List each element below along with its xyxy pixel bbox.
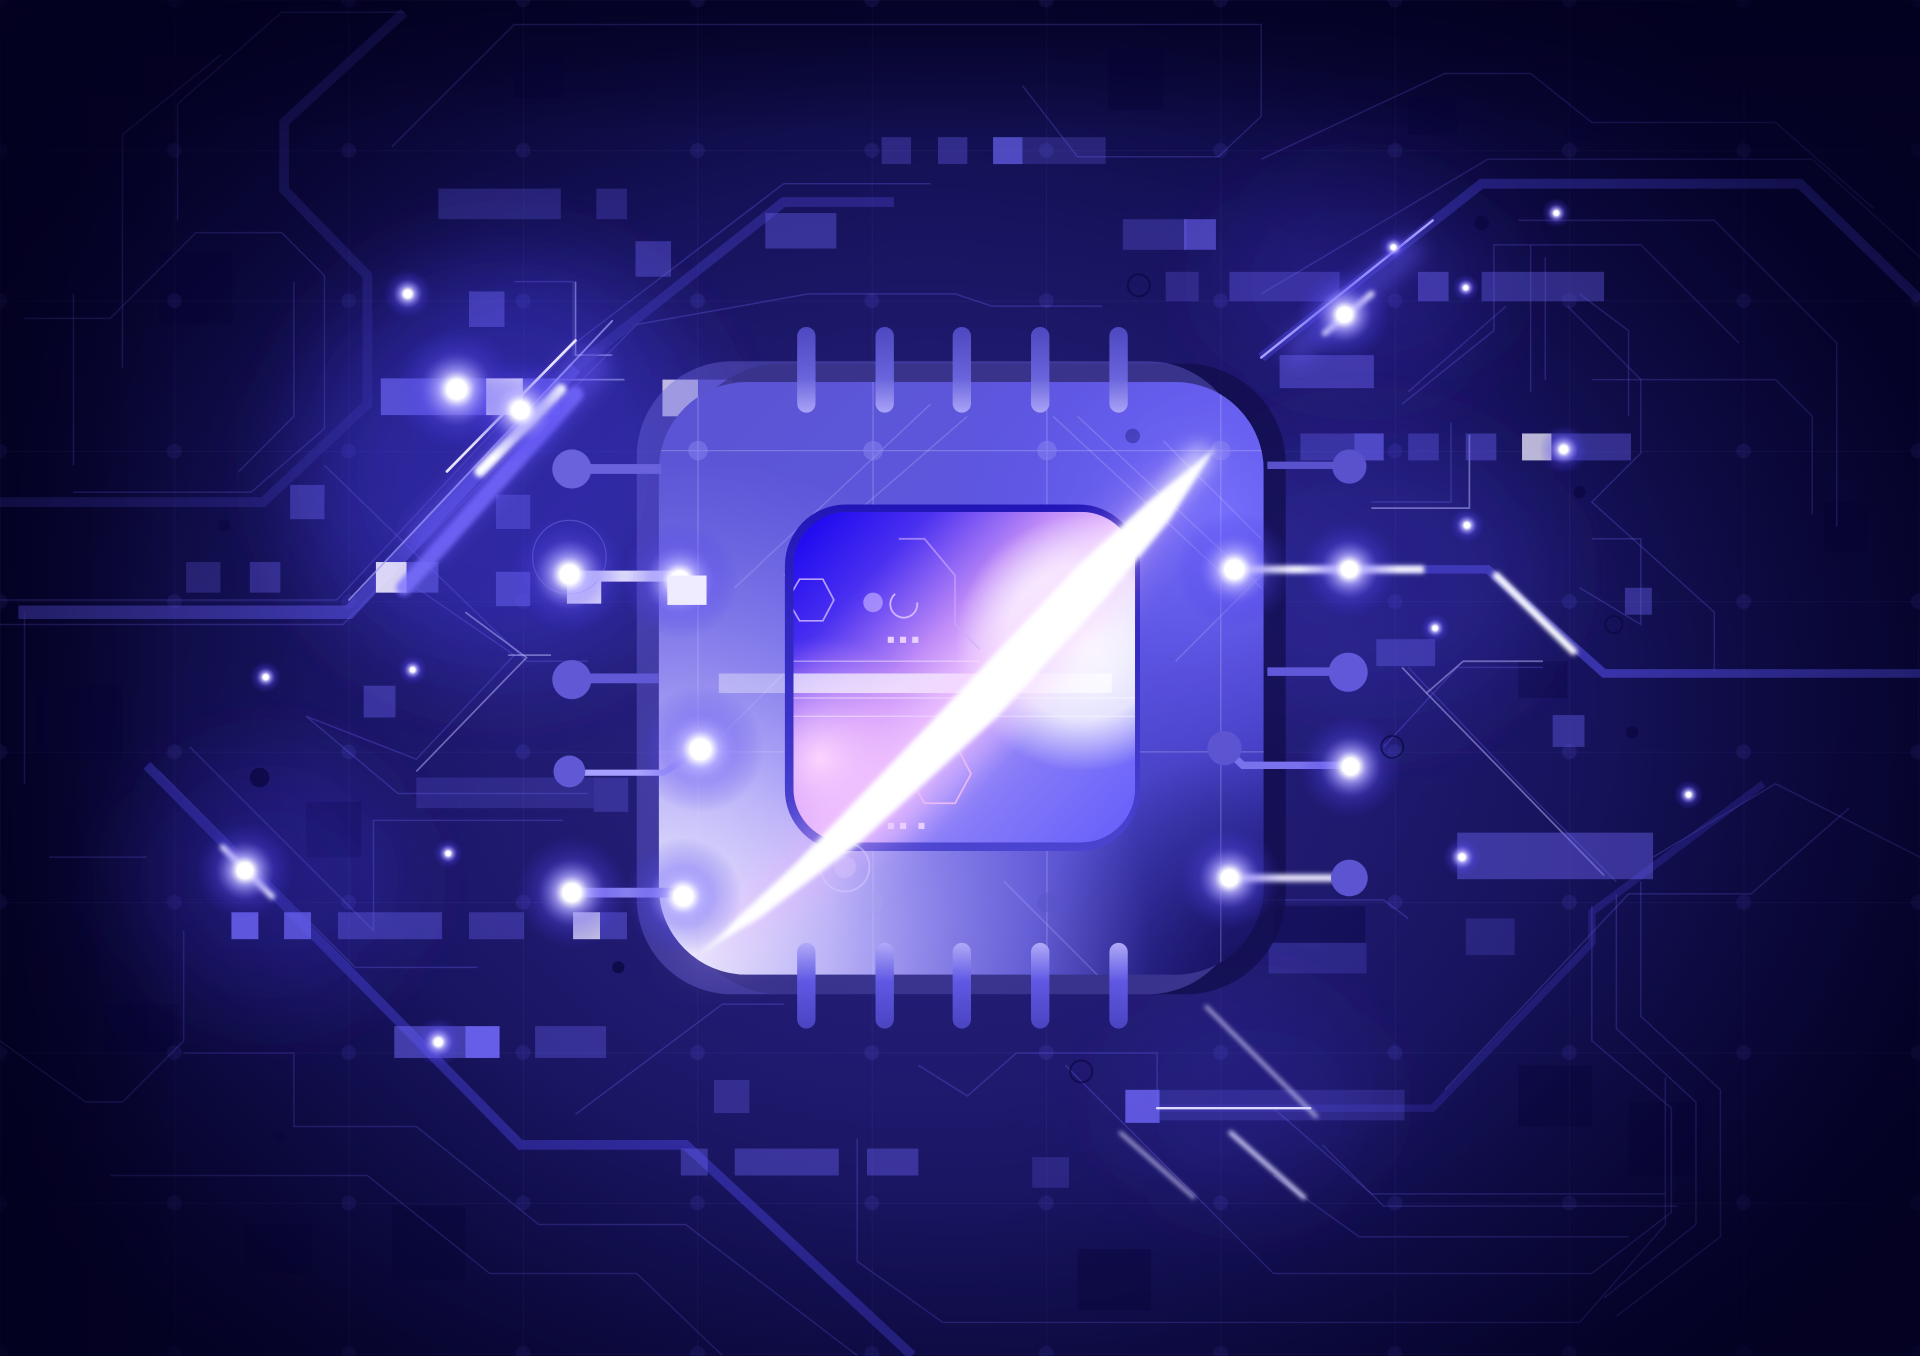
small ring vias	[1070, 274, 1622, 1082]
glowing light points	[196, 198, 1703, 1067]
chip: contact pins top	[797, 327, 1128, 413]
streak: upper left double beam	[349, 321, 612, 600]
chip: lower left ring detail	[820, 842, 869, 891]
connector: left 3	[552, 660, 659, 699]
connector: right 1	[1267, 449, 1367, 484]
chip: inner die	[787, 512, 1135, 842]
band: middle right	[1273, 569, 1920, 673]
band: upper right	[1261, 184, 1920, 358]
streak: lower right beams	[1120, 1007, 1316, 1198]
chip: contact pins bottom	[797, 943, 1128, 1029]
bright streaks	[223, 220, 1573, 1198]
connector: left 2	[511, 516, 738, 639]
band: middle left	[18, 367, 576, 612]
right connectors	[1176, 449, 1424, 929]
connector: left 4	[553, 686, 764, 813]
chip: diagonal flare core	[700, 448, 1215, 953]
die: hexagon lower	[916, 750, 972, 804]
streak: upper right beam	[1261, 220, 1433, 358]
chip: inner die ring	[785, 504, 1140, 851]
chip: diagonal flare glow	[686, 447, 1206, 961]
band: upper left	[0, 12, 404, 502]
chip: flare halo at top end	[1108, 451, 1206, 563]
chip: dark offset shadow	[681, 364, 1286, 994]
band: upper left continuation	[576, 202, 894, 367]
connector: right 2	[1176, 511, 1424, 628]
connector: left 5	[516, 836, 742, 955]
connector: right 5	[1178, 827, 1368, 929]
streak: lower left beam	[223, 847, 272, 896]
microchip	[637, 327, 1286, 1029]
chip: translucent outer layer	[637, 361, 1243, 994]
die: hexagon upper	[787, 579, 834, 621]
chip: body	[659, 382, 1264, 980]
pixel blocks	[186, 137, 1653, 1188]
ambient glow behind chip	[135, 171, 1555, 1212]
connector: right 4	[1207, 715, 1402, 818]
band: lower left	[147, 765, 912, 1356]
connector: right 3	[1267, 653, 1368, 692]
small dark vias	[218, 216, 1638, 1142]
left connectors	[511, 449, 764, 955]
streak: middle right beam	[1496, 576, 1573, 651]
connector: left 1	[552, 449, 661, 489]
bright white pixel blocks	[376, 378, 1551, 939]
light diagonal accents	[416, 282, 1604, 876]
band: lower right	[1157, 784, 1763, 1108]
